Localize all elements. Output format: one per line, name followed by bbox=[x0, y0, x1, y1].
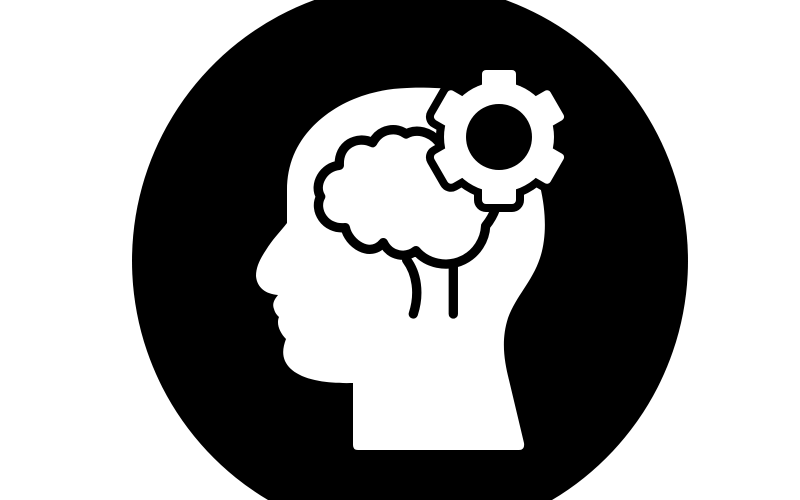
left nerve bbox=[407, 260, 417, 314]
icon: brain outline bbox=[318, 130, 496, 314]
right nerve bbox=[439, 265, 467, 314]
icon: gear bbox=[432, 70, 566, 204]
black circle background bbox=[132, 0, 688, 500]
gear black outline bbox=[432, 70, 566, 204]
gear centre hole bbox=[466, 104, 532, 170]
icon: head silhouette bbox=[256, 88, 545, 450]
gear white body bbox=[432, 70, 566, 204]
